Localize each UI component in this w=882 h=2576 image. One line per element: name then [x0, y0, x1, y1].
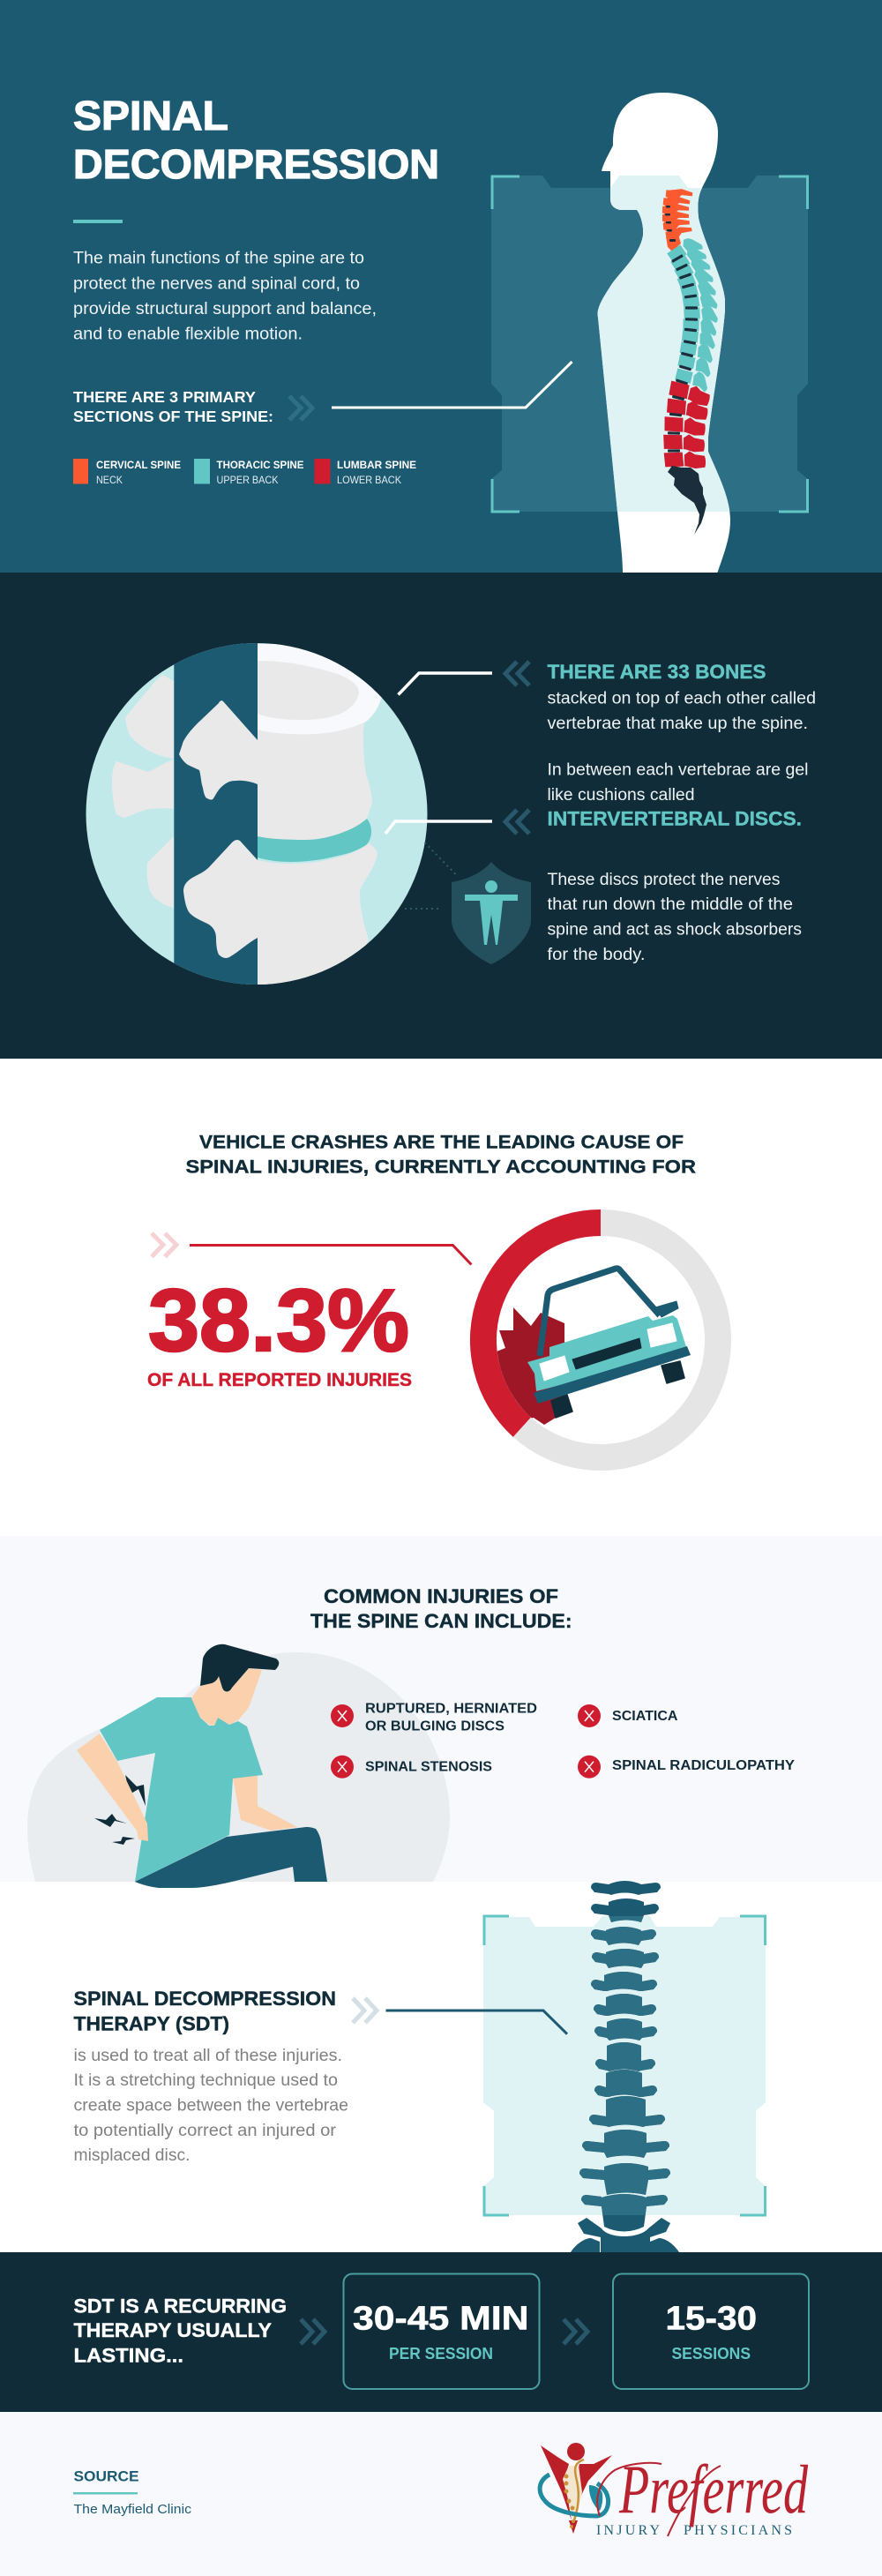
legend: cervical: NECK [96, 474, 123, 486]
frame corner brackets [492, 176, 808, 512]
hair [200, 1644, 279, 1692]
item: spinal stenosis [331, 1756, 492, 1778]
left bone fragments [112, 675, 174, 908]
logo subtitle [596, 2523, 792, 2538]
text: vertebrae: vertebrae that make up the spine. [547, 715, 808, 733]
car headlights [540, 1323, 676, 1381]
title [73, 93, 439, 187]
car grill [572, 1338, 641, 1369]
spine front view [571, 1881, 679, 2252]
text: SDT description: misplaced disc. [74, 2146, 191, 2165]
text: SDT description: is used to treat all of these injuries. [74, 2047, 342, 2065]
heading: 33 bones: THERE ARE 33 BONES [547, 661, 766, 683]
item: ruptured discs [331, 1702, 537, 1734]
chevron arrow: bones [505, 662, 529, 685]
panel: footer [0, 2412, 882, 2576]
legend: cervical: CERVICAL SPINE [96, 459, 181, 471]
intervertebral disc [258, 819, 371, 862]
lower process [183, 840, 258, 958]
band heading [74, 2295, 287, 2367]
heading: SDT: SPINAL DECOMPRESSION [74, 1988, 336, 2010]
legend: cervical [73, 459, 181, 486]
item: spinal stenosis: SPINAL STENOSIS [365, 1760, 492, 1775]
panel: vertebrae anatomy [0, 573, 882, 1059]
primary sections heading: SECTIONS OF THE SPINE: [73, 408, 273, 425]
item: sciatica: SCIATICA [612, 1709, 677, 1724]
intro paragraph: and to enable flexible motion. [73, 325, 303, 344]
frame corner brackets [484, 1916, 766, 2215]
intro paragraph: provide structural support and balance, [73, 300, 377, 318]
logo wordmark: Preferred [618, 2451, 809, 2527]
logo subtitle: INJURY [596, 2523, 660, 2538]
chevron arrow: discs [505, 810, 529, 834]
logo figure [540, 2443, 612, 2534]
text: discs function [547, 871, 802, 964]
logo: Preferred Injury Physicians [540, 2443, 809, 2538]
car hood [527, 1315, 688, 1391]
background blob [27, 1652, 450, 1882]
text: discs function: These discs protect the nerves [547, 871, 780, 889]
shirt [100, 1697, 263, 1882]
sacrum and coccyx [668, 466, 706, 535]
heading: SPINAL INJURIES, CURRENTLY ACCOUNTING FOR [185, 1156, 697, 1177]
left arm [77, 1734, 148, 1841]
donut chart [483, 1223, 718, 1457]
stat box: per session [344, 2274, 540, 2389]
panel: duration band [0, 2252, 882, 2412]
car bumper [534, 1346, 691, 1404]
sacrum [571, 2218, 679, 2252]
icon: shield with person [452, 862, 531, 964]
text: vertebrae: like cushions called [547, 786, 695, 805]
icon: car [527, 1269, 691, 1418]
lightning bolts [94, 1775, 146, 1845]
chevron arrow [353, 1998, 377, 2023]
background scan frame [483, 1916, 766, 2215]
band heading: SDT IS A RECURRING [74, 2295, 287, 2318]
heading: VEHICLE CRASHES ARE THE LEADING CAUSE OF [199, 1132, 684, 1153]
title underline [73, 220, 123, 223]
chevron arrow [152, 1233, 176, 1256]
vertebra centre strip [174, 635, 258, 997]
lumbar vertebrae [663, 380, 712, 469]
text: SDT description: It is a stretching technique used to [74, 2071, 338, 2090]
panel: common injuries [0, 1536, 882, 1882]
car wheels [551, 1361, 684, 1418]
band heading: LASTING... [74, 2345, 183, 2367]
source underline [73, 2492, 138, 2495]
logo subtitle: PHYSICIANS [684, 2523, 792, 2538]
spine side view [662, 187, 718, 535]
cervical discs [665, 206, 676, 242]
title: SPINAL [73, 93, 228, 139]
primary sections heading: THERE ARE 3 PRIMARY [73, 388, 256, 406]
lumbar discs [668, 395, 684, 453]
text: discs function: for the body. [547, 946, 646, 964]
icon: crash burst [497, 1307, 564, 1425]
intro paragraph: The main functions of the spine are to [73, 249, 364, 268]
magnified vertebrae circle [86, 635, 430, 997]
heading: COMMON INJURIES OF [324, 1585, 558, 1607]
legend: spine sections [73, 459, 416, 486]
text: vertebrae [547, 690, 816, 805]
cervical vertebrae [662, 187, 693, 251]
heading: discs: INTERVERTEBRAL DISCS. [547, 808, 802, 830]
heading [185, 1132, 697, 1177]
legend: lumbar: LOWER BACK [337, 474, 401, 486]
legend: thoracic: THORACIC SPINE [217, 459, 303, 471]
chevron arrow 1 [301, 2319, 325, 2344]
callout line [190, 1246, 471, 1265]
upper process [179, 700, 258, 799]
item: sciatica [578, 1704, 677, 1727]
logo swash [597, 2463, 721, 2536]
trousers [135, 1827, 327, 1888]
callout line: discs [385, 821, 492, 834]
body scan frame [491, 176, 808, 512]
band heading: THERAPY USUALLY [74, 2319, 272, 2341]
title: DECOMPRESSION [73, 141, 439, 187]
text: vertebrae: stacked on top of each other called [547, 690, 816, 708]
statistic: 38.3% [148, 1271, 409, 1370]
source heading: SOURCE [74, 2468, 139, 2485]
right arm [233, 1775, 297, 1831]
legend: lumbar [314, 459, 416, 486]
car mirror [655, 1301, 678, 1317]
item: radiculopathy: SPINAL RADICULOPATHY [612, 1758, 796, 1773]
stat box: sessions [613, 2274, 809, 2389]
text: discs function: that run down the middle of the [547, 895, 793, 914]
panel: vehicle crashes [148, 1134, 731, 1471]
callout line to body [332, 362, 572, 408]
face and neck [191, 1668, 262, 1726]
illustration: man with back pain [77, 1644, 327, 1888]
chevron arrow [289, 396, 312, 420]
upper vertebra cavity [258, 661, 359, 720]
legend: thoracic [194, 459, 303, 486]
item: ruptured discs: OR BULGING DISCS [365, 1719, 505, 1734]
legend: thoracic: UPPER BACK [217, 474, 279, 486]
panel: therapy [74, 1881, 766, 2252]
source name: The Mayfield Clinic [74, 2502, 192, 2517]
callout line: bones [399, 673, 492, 695]
primary sections heading [73, 388, 273, 425]
heading: THE SPINE CAN INCLUDE: [310, 1610, 572, 1632]
panel: intro header [0, 0, 882, 573]
upper vertebra body [258, 716, 372, 840]
callout line [386, 2011, 567, 2034]
stat box: per session: PER SESSION [389, 2345, 493, 2363]
thoracic vertebrae [665, 233, 718, 393]
heading: SDT [74, 1988, 336, 2035]
intro paragraph [73, 249, 377, 344]
thoracic discs [671, 254, 698, 386]
statistic caption: OF ALL REPORTED INJURIES [147, 1370, 412, 1390]
text: discs function: spine and act as shock absorbers [547, 921, 802, 940]
legend: lumbar: LUMBAR SPINE [337, 459, 416, 471]
stat box: per session: 30-45 MIN [353, 2301, 529, 2338]
upper vertebra cap [258, 644, 388, 734]
item: radiculopathy [578, 1756, 796, 1778]
stat box: sessions: SESSIONS [672, 2345, 751, 2363]
text: SDT description [74, 2047, 348, 2165]
lower vertebra body [258, 843, 377, 997]
heading [310, 1585, 572, 1632]
body silhouette [598, 93, 730, 573]
car roof frame [540, 1269, 660, 1356]
stat box: sessions: 15-30 [665, 2301, 757, 2338]
item: ruptured discs: RUPTURED, HERNIATED [365, 1702, 537, 1717]
dotted connectors [405, 842, 456, 909]
intro paragraph: protect the nerves and spinal cord, to [73, 275, 360, 293]
text: vertebrae: In between each vertebrae are gel [547, 761, 808, 780]
heading: SDT: THERAPY (SDT) [74, 2013, 229, 2035]
list of injuries [331, 1702, 796, 1778]
text: SDT description: to potentially correct an injured or [74, 2122, 337, 2140]
text: SDT description: create space between the vertebrae [74, 2097, 348, 2115]
chevron arrow 2 [564, 2319, 587, 2344]
